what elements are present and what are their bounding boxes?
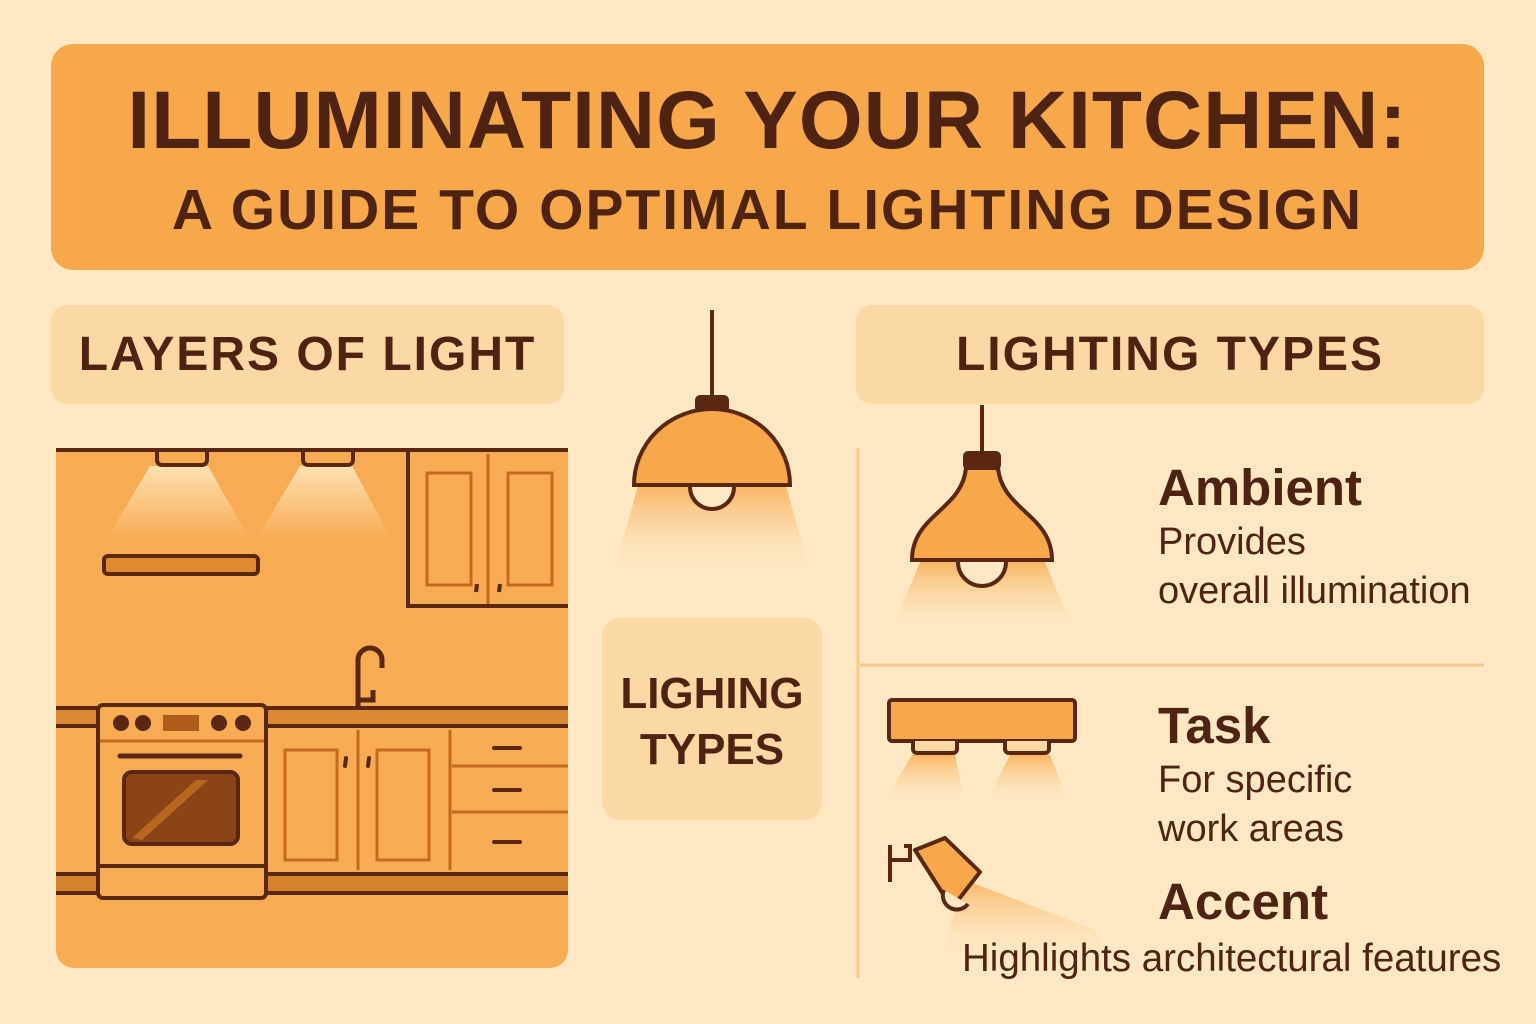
icon: ambient pendant: [890, 405, 1075, 635]
text: accent: Accent: [1158, 873, 1328, 930]
label box: lighing types: LIGHING: [620, 669, 804, 718]
title: ILLUMINATING YOUR KITCHEN:: [127, 75, 1408, 166]
divider lines: [858, 448, 1484, 978]
text: task: work areas: [1158, 808, 1344, 850]
heading: layers of light: LAYERS OF LIGHT: [79, 328, 536, 381]
kitchen illustration: [56, 448, 568, 968]
label box: lighing types: [602, 618, 822, 820]
text: ambient: [1158, 459, 1471, 612]
text: task: Task: [1158, 697, 1270, 754]
subtitle: A GUIDE TO OPTIMAL LIGHTING DESIGN: [172, 178, 1363, 242]
heading: lighting types: LIGHTING TYPES: [956, 328, 1384, 381]
text: ambient: Provides: [1158, 521, 1306, 563]
text: task: For specific: [1158, 759, 1352, 801]
label box: lighing types: TYPES: [640, 725, 784, 774]
icon: accent spotlight: [890, 838, 1110, 960]
heading: lighting types: [856, 305, 1484, 404]
icon: task under-cabinet light: [882, 700, 1075, 805]
text: task: [1158, 697, 1352, 850]
icon: central pendant lamp: [612, 310, 812, 580]
text: accent description: Highlights architectural features: [962, 937, 1501, 980]
heading: layers of light: [51, 305, 564, 404]
header banner: [51, 44, 1484, 270]
text: ambient: overall illumination: [1158, 570, 1471, 612]
text: ambient: Ambient: [1158, 459, 1362, 516]
